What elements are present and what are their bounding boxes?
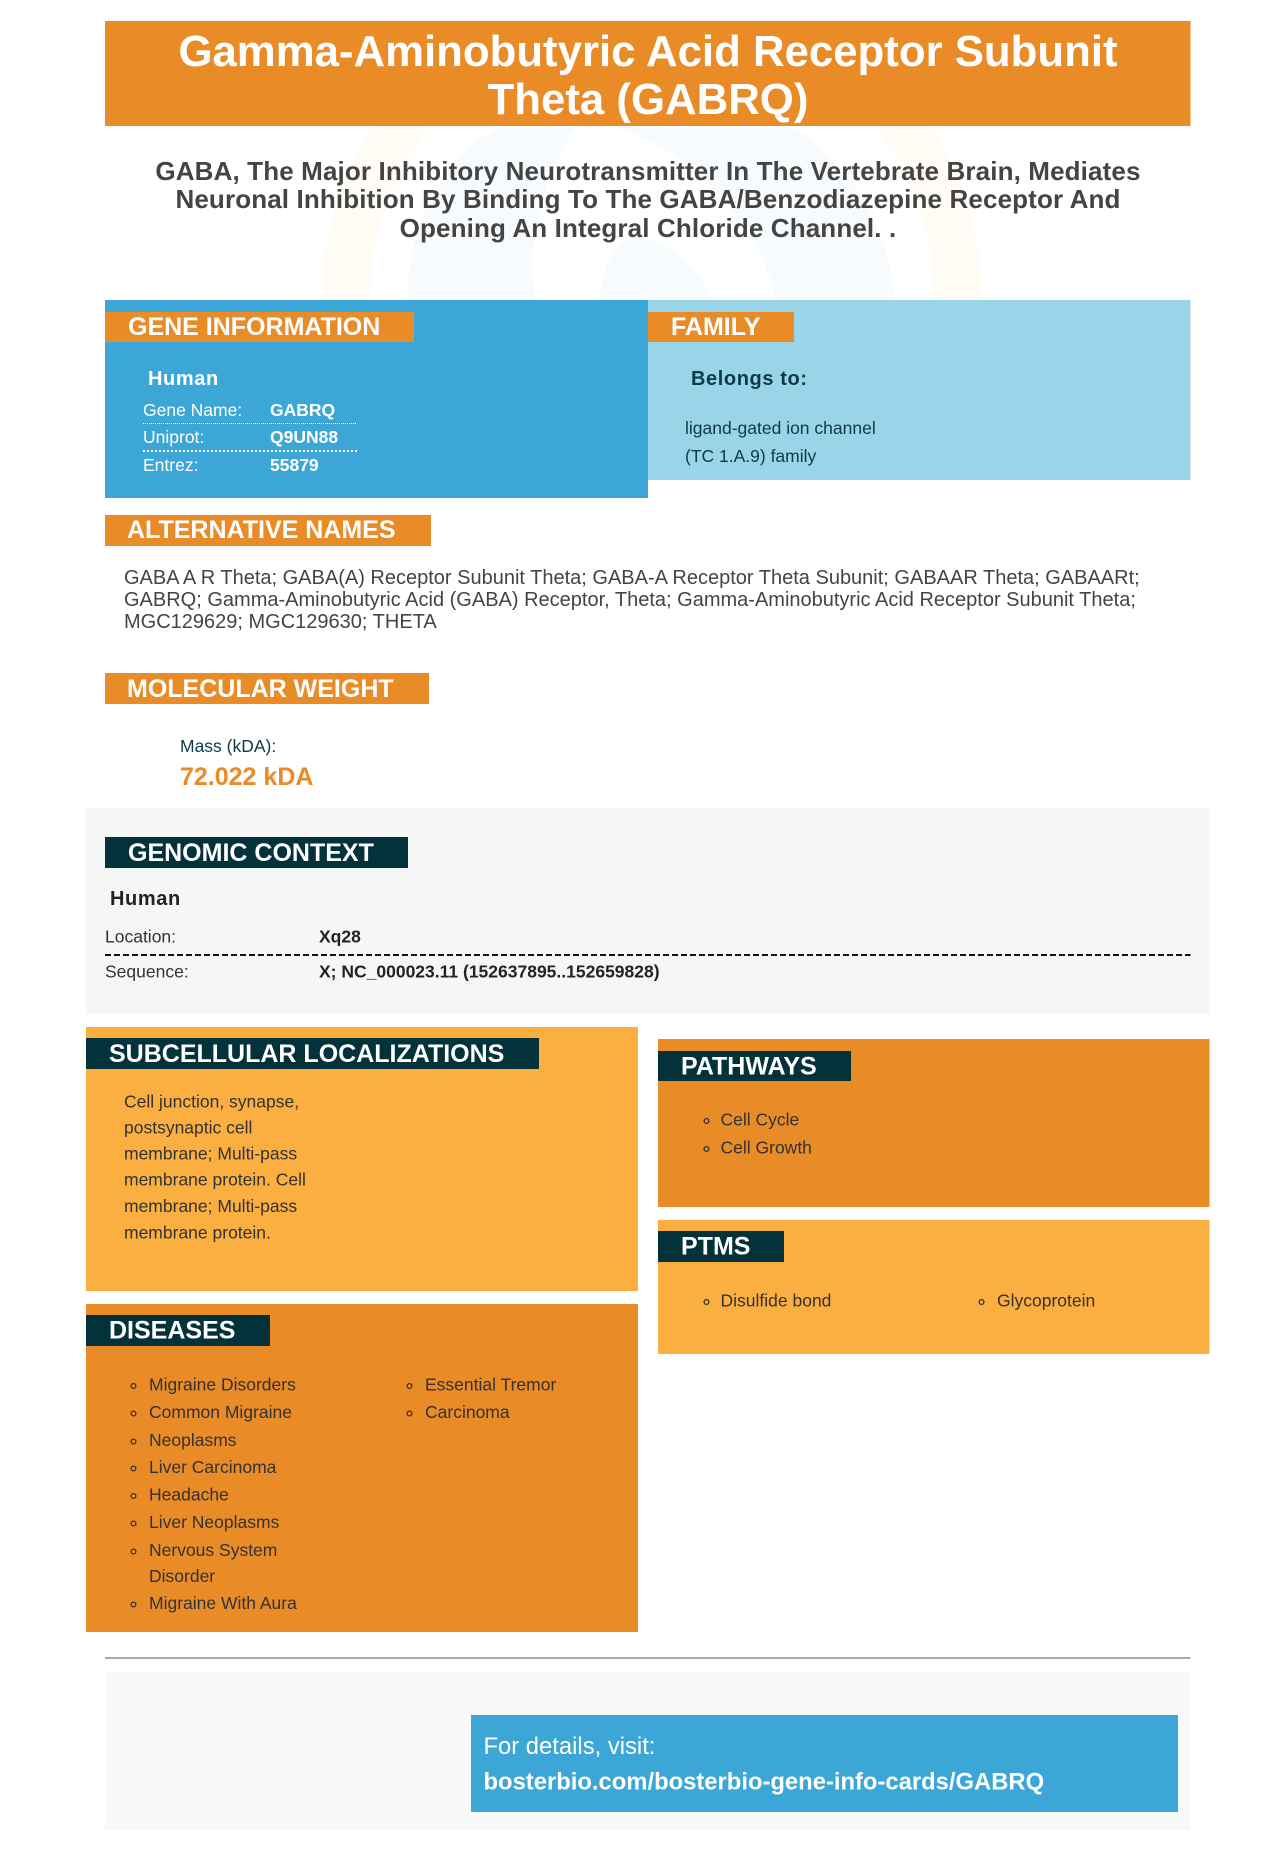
diseases list: Liver Carcinoma [149,1457,277,1477]
heading: genomic context: GENOMIC CONTEXT [128,839,374,867]
background watermark logo [322,126,982,300]
alternative names text: MGC129629; MGC129630; THETA [124,611,437,633]
pathways list: Cell Cycle [720,1110,799,1130]
callout: details link: bosterbio.com/bosterbio-gene-info-cards/GABRQ [484,1768,1044,1796]
diseases list: Common Migraine [149,1402,292,1422]
molecular weight value [180,736,313,791]
genomic context table: Sequence: [105,962,189,982]
gene info table: 55879 [270,455,319,475]
title banner: Theta (GABRQ) [488,75,808,124]
heading: gene information: GENE INFORMATION [128,313,380,341]
family text [685,368,876,466]
ptms list: Disulfide bond [720,1290,831,1310]
diseases list: Migraine Disorders [149,1374,296,1394]
panel: pathways [658,1039,1210,1207]
family text: Belongs to: [691,368,808,390]
panel: family [648,300,1190,480]
localization text [124,1092,306,1242]
panel: genomic context [86,808,1210,1014]
alternative names text: GABA A R Theta; GABA(A) Receptor Subunit Theta; GABA-A Receptor Theta Subunit; GABAAR Theta; GABAARt; [124,567,1140,589]
diseases list: Migraine With Aura [149,1593,297,1613]
alternative names text: GABRQ; Gamma-Aminobutyric Acid (GABA) Receptor, Theta; Gamma-Aminobutyric Acid Receptor Subunit Theta; [124,589,1136,611]
heading: family: FAMILY [671,313,761,341]
subtitle description: Opening An Integral Chloride Channel. . [400,213,896,243]
pathways list [704,1110,812,1158]
diseases list: Essential Tremor [425,1374,556,1394]
subtitle description [155,156,1141,243]
ptms list: Glycoprotein [997,1290,1095,1310]
subtitle description: GABA, The Major Inhibitory Neurotransmitter In The Vertebrate Brain, Mediates [155,156,1141,186]
heading: molecular weight: MOLECULAR WEIGHT [127,675,394,703]
gene info table: Human [148,368,219,390]
genomic context table: X; NC_000023.11 (152637895..152659828) [319,962,660,982]
localization text: Cell junction, synapse, [124,1092,299,1112]
heading: subcellular localizations: SUBCELLULAR LOCALIZATIONS [109,1040,504,1068]
diseases list [131,1374,556,1613]
title banner [105,21,1190,126]
alternative names text [124,567,1140,633]
callout: details link: For details, visit: [484,1733,655,1760]
heading: diseases [86,1315,270,1346]
localization text: postsynaptic cell [124,1118,252,1138]
diseases list: Headache [149,1484,229,1504]
callout: details link [471,1715,1178,1812]
genomic context table: Xq28 [319,926,361,946]
title banner: Gamma-Aminobutyric Acid Receptor Subunit [178,27,1118,76]
gene info table [143,368,357,475]
panel: gene information [105,300,648,498]
family text: (TC 1.A.9) family [685,446,817,466]
localization text: membrane protein. [124,1222,271,1242]
diseases list: Liver Neoplasms [149,1512,280,1532]
localization text: membrane; Multi-pass [124,1196,297,1216]
heading: family [648,312,794,342]
genomic context table: Location: [105,926,176,946]
gene info table: Entrez: [143,455,198,475]
gene info table: Q9UN88 [270,427,338,447]
pathways list: Cell Growth [720,1138,812,1158]
subtitle description: Neuronal Inhibition By Binding To The GABA/Benzodiazepine Receptor And [175,184,1121,214]
molecular weight value: Mass (kDA): [180,736,276,756]
panel: ptms [658,1220,1210,1354]
diseases list: Neoplasms [149,1430,237,1450]
heading: pathways: PATHWAYS [681,1052,817,1080]
panel: diseases [86,1304,638,1632]
localization text: membrane; Multi-pass [124,1144,297,1164]
heading: pathways [658,1051,851,1081]
heading: ptms: PTMS [681,1232,750,1260]
molecular weight value: 72.022 kDA [180,763,313,791]
heading: alternative names: ALTERNATIVE NAMES [127,516,396,544]
gene info table: GABRQ [270,400,335,420]
diseases list: Carcinoma [425,1402,510,1422]
footer panel [105,1672,1190,1830]
family text: ligand-gated ion channel [685,418,876,438]
heading: diseases: DISEASES [109,1316,235,1344]
diseases list: Nervous System [149,1540,277,1560]
heading: ptms [658,1231,784,1262]
gene info table: Uniprot: [143,427,204,447]
panel: subcellular localizations [86,1027,638,1291]
genomic context table: Human [110,888,181,910]
genomic context table [105,888,1190,982]
localization text: membrane protein. Cell [124,1170,306,1190]
ptms list [704,1290,1095,1310]
gene info table: Gene Name: [143,400,242,420]
diseases list: Disorder [149,1566,215,1586]
